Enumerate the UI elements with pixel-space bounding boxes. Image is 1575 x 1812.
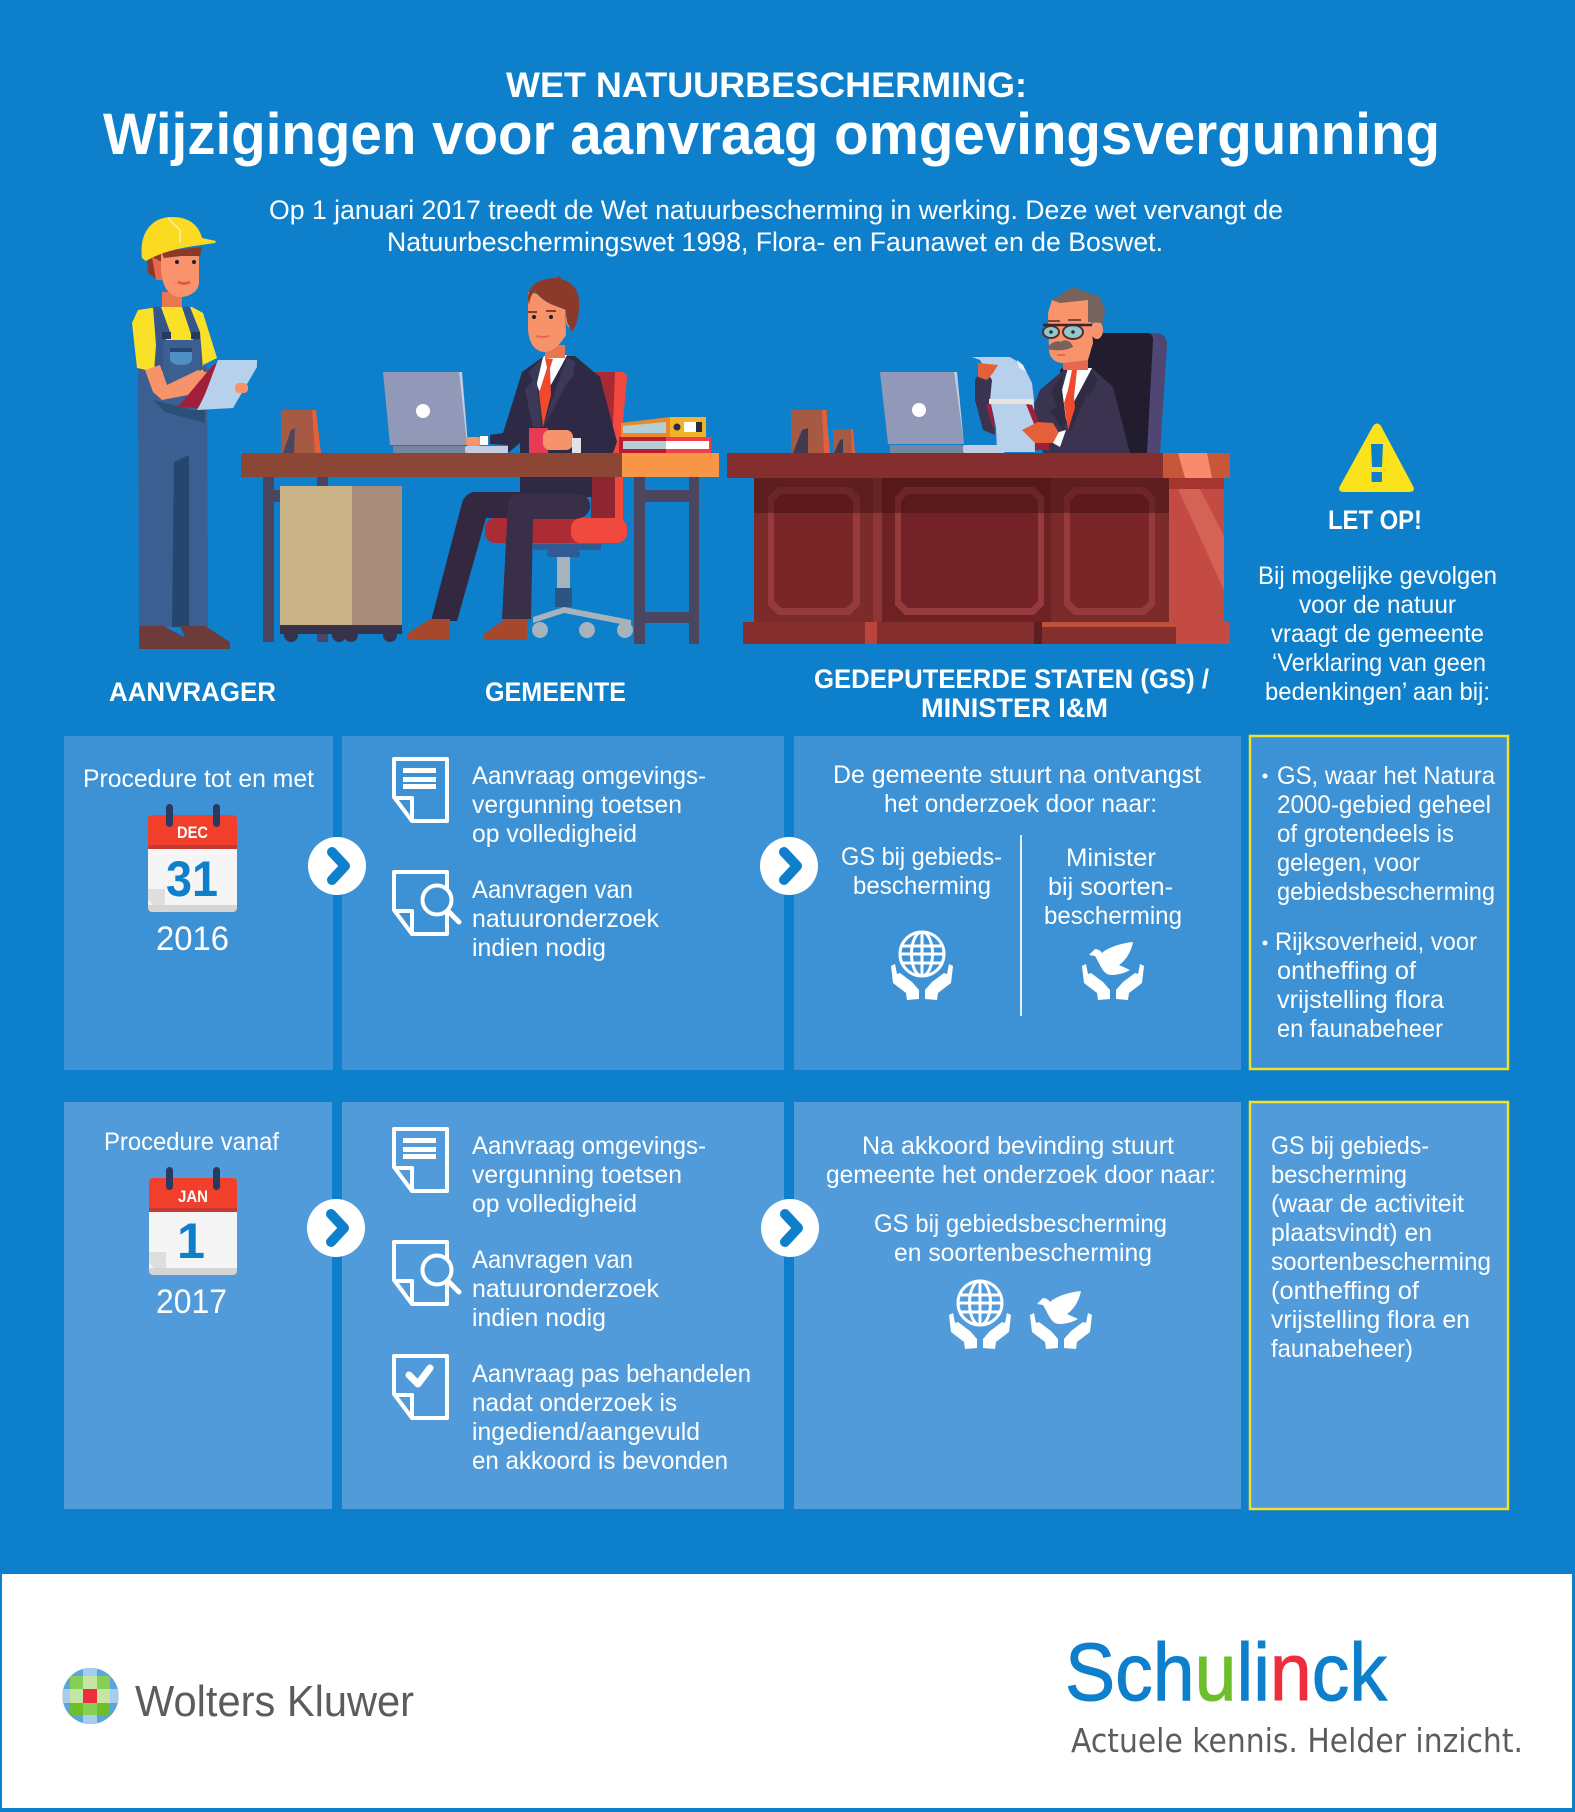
text: gs bij gebiedsbescherming: GS bij gebieds-	[841, 843, 1002, 871]
text: aanvraag pas behandelen: ingediend/aangevuld	[472, 1418, 700, 1446]
logo: schulinck: Schulinck	[1065, 1627, 1388, 1718]
icon: document with magnifier	[394, 1242, 459, 1304]
tagline: Actuele kennis. Helder inzicht.	[1071, 1721, 1523, 1760]
text: gs bij gebiedsbescherming: soortenbescherming	[1271, 1248, 1491, 1276]
text: na akkoord bevinding: gemeente het onderzoek door naar:	[826, 1161, 1216, 1189]
text: gs natura 2000: 2000-gebied geheel	[1277, 791, 1491, 819]
intro text	[269, 195, 1283, 257]
arrow: row 2 aanvrager to gemeente	[307, 1199, 365, 1257]
icon: globe in hands	[949, 1281, 1011, 1349]
text: gs bij gebiedsbescherming: GS bij gebieds-	[1271, 1132, 1429, 1160]
heading: gedeputeerde staten / minister	[814, 664, 1209, 723]
text: aanvraag pas behandelen: en akkoord is bevonden	[472, 1447, 728, 1475]
illustration: desk and man (gemeente)	[241, 276, 719, 644]
text: gs bij gebiedsbescherming: bescherming	[853, 872, 991, 900]
text: gs natura 2000	[1277, 762, 1495, 906]
text: gs bij gebiedsbescherming: (waar de activiteit	[1271, 1190, 1464, 1218]
heading: gedeputeerde staten / minister: MINISTER I&M	[921, 693, 1108, 723]
icon: calendar dec 31: DEC	[177, 823, 208, 842]
text block: let op: vraagt de gemeente	[1271, 620, 1484, 648]
text: natuuronderzoek: indien nodig	[472, 1304, 606, 1332]
text: rijksoverheid	[1275, 928, 1477, 1043]
panel: let op 2016	[1250, 736, 1508, 1069]
intro text: Natuurbeschermingswet 1998, Flora- en Faunawet en de Boswet.	[387, 227, 1163, 257]
text: toetsen op volledigheid: vergunning toetsen	[472, 1161, 682, 1189]
text: rijksoverheid: Rijksoverheid, voor	[1275, 928, 1477, 956]
footer panel	[2, 1574, 1572, 1808]
arrow: row 2 gemeente to gs	[761, 1199, 819, 1257]
text block: let op	[1258, 562, 1497, 706]
text block: let op: bedenkingen’ aan bij:	[1265, 678, 1490, 706]
text: toetsen op volledigheid	[472, 762, 706, 848]
label: procedure vanaf: Procedure vanaf	[104, 1128, 279, 1156]
panel: gemeente 2017	[342, 1102, 784, 1509]
text: gemeente stuurt door	[833, 761, 1201, 818]
icon: document with magnifier	[394, 872, 459, 934]
text: gs bij gebiedsbescherming: plaatsvindt) en	[1271, 1219, 1432, 1247]
illustration: man at executive desk (GS / minister)	[727, 287, 1230, 644]
year 2017: 2017	[156, 1283, 227, 1321]
label: procedure tot en met: Procedure tot en met	[83, 765, 314, 793]
text: toetsen op volledigheid: vergunning toetsen	[472, 791, 682, 819]
text: rijksoverheid: ontheffing of	[1277, 957, 1416, 985]
text block: let op: ‘Verklaring van geen	[1272, 649, 1486, 677]
text: rijksoverheid: en faunabeheer	[1277, 1015, 1443, 1043]
text: natuuronderzoek	[472, 1246, 659, 1332]
icon: document	[394, 759, 447, 821]
icon: globe in hands	[891, 932, 953, 1000]
text: natuuronderzoek: indien nodig	[472, 934, 606, 962]
text block: let op: voor de natuur	[1299, 591, 1456, 619]
text: rijksoverheid: vrijstelling flora	[1277, 986, 1444, 1014]
text: natuuronderzoek: Aanvragen van	[472, 1246, 633, 1274]
text: gs natura 2000: gebiedsbescherming	[1277, 878, 1495, 906]
text: gs natura 2000: GS, waar het Natura	[1277, 762, 1495, 790]
year 2016: 2016	[156, 920, 229, 958]
text: aanvraag pas behandelen	[472, 1360, 751, 1475]
icon: calendar jan 1	[149, 1167, 237, 1275]
icon: document	[394, 1129, 447, 1191]
text: toetsen op volledigheid: Aanvraag omgevings-	[472, 762, 706, 790]
text: minister bij soortenbescherming: Minister	[1066, 844, 1156, 872]
text: gs bij gebiedsbescherming: bescherming	[1271, 1161, 1407, 1189]
text: gemeente stuurt door: De gemeente stuurt na ontvangst	[833, 761, 1201, 789]
text: gs bij gebieds- en soortenbescherming: en soortenbescherming	[894, 1239, 1152, 1267]
text: gs bij gebiedsbescherming: vrijstelling flora en	[1271, 1306, 1470, 1334]
text: na akkoord bevinding: Na akkoord bevinding stuurt	[862, 1132, 1174, 1160]
text: toetsen op volledigheid: op volledigheid	[472, 820, 637, 848]
heading: aanvrager: AANVRAGER	[109, 677, 276, 707]
text: gs bij gebieds- en soortenbescherming	[874, 1210, 1167, 1267]
panel: gemeente 2016	[342, 736, 784, 1070]
panel: procedure tot en met 2016	[64, 736, 333, 1070]
arrow: row 1 gemeente to gs	[760, 837, 818, 895]
icon: dove in hands	[1082, 942, 1144, 1000]
text: natuuronderzoek: natuuronderzoek	[472, 905, 659, 933]
text block: let op: Bij mogelijke gevolgen	[1258, 562, 1497, 590]
icon: calendar jan 1: 1	[177, 1213, 205, 1269]
title: Wijzigingen voor aanvraag omgevingsvergunning	[103, 102, 1440, 167]
text: gs bij gebiedsbescherming	[841, 843, 1002, 900]
text: gs natura 2000: of grotendeels is	[1277, 820, 1454, 848]
panel: procedure vanaf 2017	[64, 1102, 332, 1509]
text: natuuronderzoek: Aanvragen van	[472, 876, 633, 904]
icon: warning triangle	[1339, 424, 1414, 492]
text: gs natura 2000: gelegen, voor	[1277, 849, 1420, 877]
text: na akkoord bevinding	[826, 1132, 1216, 1189]
text: toetsen op volledigheid: Aanvraag omgevings-	[472, 1132, 706, 1160]
text: toetsen op volledigheid: op volledigheid	[472, 1190, 637, 1218]
title	[103, 66, 1440, 167]
panel: gs / minister 2016	[794, 736, 1241, 1070]
icon: document with check mark	[394, 1356, 447, 1418]
text: gs bij gebiedsbescherming	[1271, 1132, 1491, 1363]
text: gs bij gebieds- en soortenbescherming: GS bij gebiedsbescherming	[874, 1210, 1167, 1238]
text: natuuronderzoek: natuuronderzoek	[472, 1275, 659, 1303]
logo: wolters kluwer	[62, 1667, 414, 1726]
heading: gemeente: GEMEENTE	[485, 677, 626, 707]
text: gs bij gebiedsbescherming: (ontheffing of	[1271, 1277, 1419, 1305]
logo: wolters kluwer: Wolters Kluwer	[135, 1677, 414, 1726]
text: aanvraag pas behandelen: Aanvraag pas behandelen	[472, 1360, 751, 1388]
text: toetsen op volledigheid	[472, 1132, 706, 1218]
text: minister bij soortenbescherming	[1044, 844, 1182, 930]
illustration: worker (aanvrager)	[132, 217, 258, 649]
title: WET NATUURBESCHERMING:	[506, 66, 1027, 105]
icon: calendar jan 1: JAN	[178, 1187, 208, 1206]
heading: let op: LET OP!	[1328, 505, 1422, 535]
icon: dove in hands	[1030, 1291, 1092, 1349]
panel: let op 2017	[1250, 1102, 1508, 1509]
icon: calendar dec 31: 31	[166, 851, 218, 907]
panel: gs 2017	[794, 1102, 1241, 1509]
text: minister bij soortenbescherming: bescherming	[1044, 902, 1182, 930]
text: gs bij gebiedsbescherming: faunabeheer)	[1271, 1335, 1413, 1363]
text: aanvraag pas behandelen: nadat onderzoek is	[472, 1389, 677, 1417]
text: gemeente stuurt door: het onderzoek door naar:	[884, 790, 1157, 818]
icon: calendar dec 31	[148, 804, 237, 912]
intro text: Op 1 januari 2017 treedt de Wet natuurbescherming in werking. Deze wet vervangt de	[269, 195, 1283, 225]
text: minister bij soortenbescherming: bij soorten-	[1048, 873, 1173, 901]
arrow: row 1 aanvrager to gemeente	[308, 837, 366, 895]
text: natuuronderzoek	[472, 876, 659, 962]
heading: gedeputeerde staten / minister: GEDEPUTEERDE STATEN (GS) /	[814, 664, 1209, 694]
